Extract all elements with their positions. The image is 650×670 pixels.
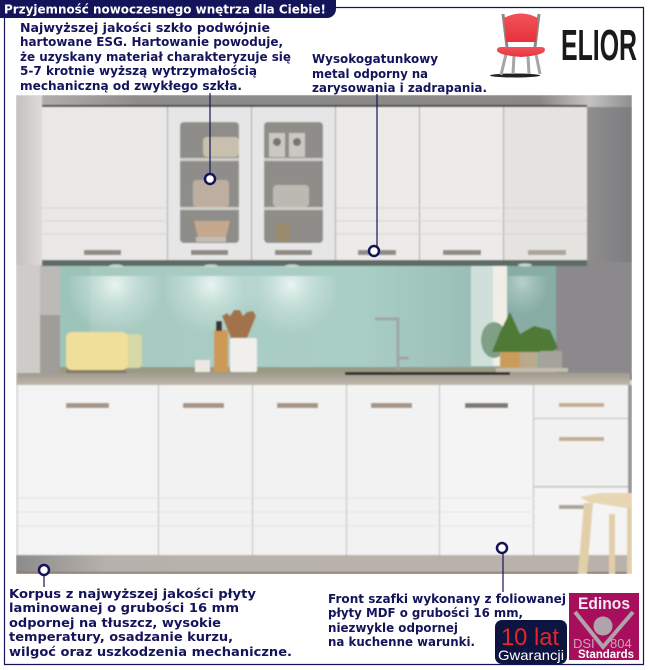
callout: front: Front szafki wykonany z foliowanej	[328, 592, 566, 606]
header banner	[0, 0, 336, 18]
ceiling band	[16, 95, 632, 107]
spot lights	[109, 263, 532, 268]
bottle and utensils	[195, 310, 257, 372]
kitchen photo	[16, 95, 632, 574]
lower cabinets	[18, 385, 628, 555]
upper handles	[84, 250, 566, 255]
faucet	[375, 319, 409, 370]
marker: front	[497, 543, 507, 592]
callout: metal: metal odporny na	[312, 67, 428, 81]
badge: Edinos standards: 804	[610, 636, 632, 651]
callout: glass: Najwyższej jakości szkło podwójnie	[20, 21, 270, 35]
lower handles	[66, 403, 604, 509]
callout: glass: że uzyskany materiał charakteryzuje się	[20, 50, 291, 64]
badge: 10 lat warranty: 10 lat	[501, 624, 559, 651]
callout: metal: zarysowania i zadrapania.	[312, 81, 487, 95]
callout: body: odpornej na tłuszcz, wysokie	[9, 616, 221, 630]
badge: Edinos standards: Edinos	[578, 594, 630, 613]
callout: glass: hartowane ESG. Hartowanie powoduje,	[20, 35, 283, 49]
callout: body: temperatury, osadzanie kurzu,	[9, 630, 233, 644]
countertop	[17, 367, 630, 385]
logo: Elior chair	[490, 14, 637, 78]
right wall	[587, 107, 632, 380]
glass door right	[264, 122, 323, 243]
plants	[481, 312, 568, 372]
toaster	[66, 332, 142, 373]
backsplash	[60, 266, 556, 373]
callout: body: Korpus z najwyższej jakości płyty	[9, 587, 256, 601]
under-cabinet shadow	[42, 260, 587, 266]
glass door left	[180, 122, 239, 243]
callout: metal: Wysokogatunkowy	[312, 52, 438, 66]
callout: metal	[312, 52, 487, 95]
callout: glass: 5-7 krotnie wyższą wytrzymałością	[20, 64, 257, 78]
callout: glass	[20, 21, 291, 93]
callout: body: wilgoć oraz uszkodzenia mechaniczne.	[9, 645, 292, 659]
toe kick	[16, 555, 632, 572]
marker: handle	[369, 94, 379, 256]
stool	[578, 493, 632, 574]
badge: Edinos standards: Standards	[578, 649, 634, 661]
badge: 10 lat warranty: Gwarancji	[498, 647, 564, 663]
badge: Edinos standards: DSI	[573, 636, 595, 651]
callout: front: na kuchenne warunki.	[328, 635, 475, 649]
header text: Przyjemność nowoczesnego wnętrza dla Ciebie!	[4, 2, 326, 16]
callout: body: laminowanej o grubości 16 mm	[9, 601, 239, 615]
left wall	[16, 95, 42, 385]
callout: front: niezwykle odpornej	[328, 621, 458, 635]
marker: body	[39, 565, 49, 587]
callout: front	[328, 592, 566, 649]
callout: body	[9, 587, 292, 659]
callout: front: płyty MDF o grubości 16 mm,	[328, 606, 523, 620]
upper cabinets	[42, 107, 587, 260]
badge: 10 lat warranty	[495, 620, 567, 664]
icon: chair	[490, 14, 545, 78]
badge: Edinos standards	[569, 593, 639, 661]
marker: glass	[205, 93, 215, 184]
callout: glass: mechaniczną od zwykłego szkła.	[20, 79, 242, 93]
